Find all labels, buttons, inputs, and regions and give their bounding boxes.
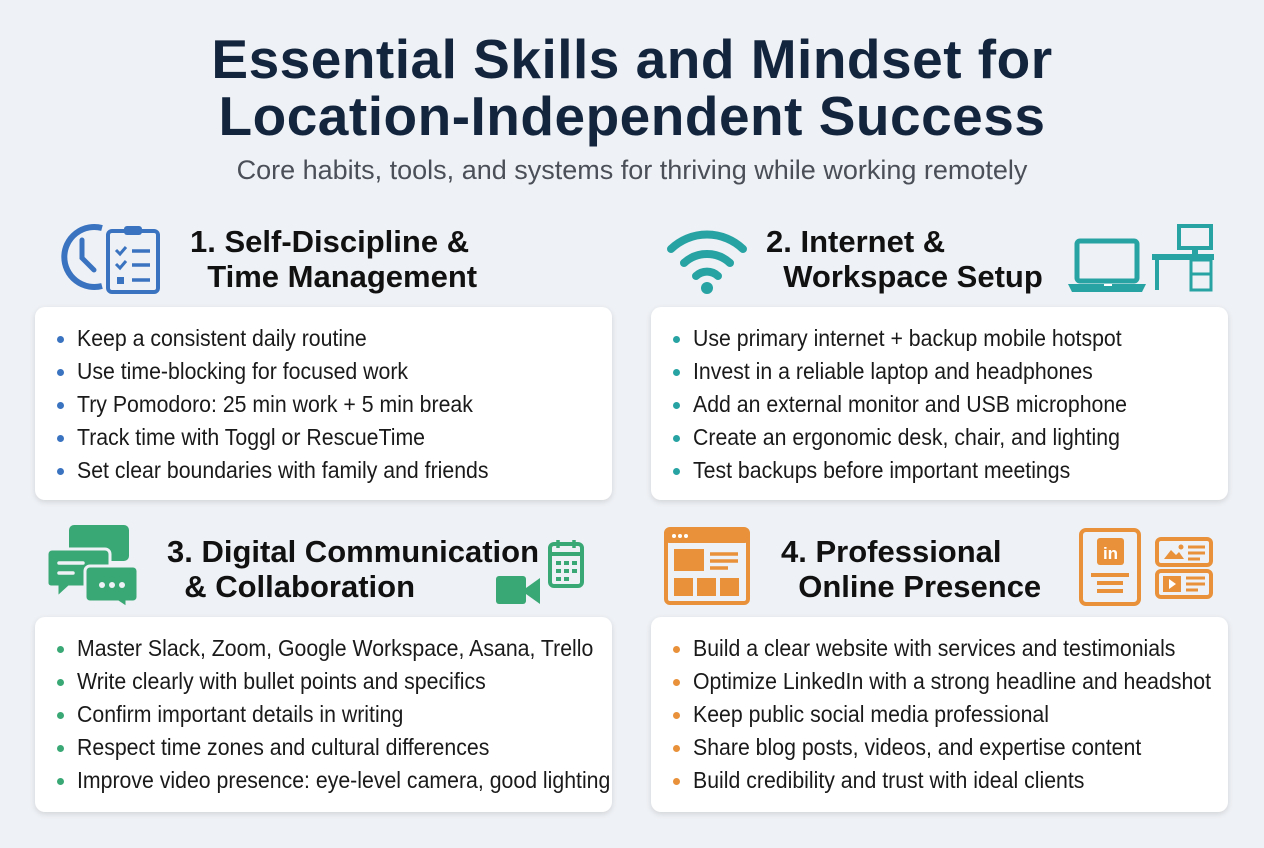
heading 3: 3. Digital Communication (167, 534, 539, 569)
subtitle: Core habits, tools, and systems for thriving while working remotely (237, 155, 1027, 185)
panel: online presence: Keep public social media professional (693, 701, 1049, 727)
panel: online presence (651, 617, 1228, 812)
icon: linkedin and media (1079, 528, 1213, 606)
title (211, 28, 1053, 147)
heading 4: Online Presence (798, 569, 1041, 604)
panel: internet: Create an ergonomic desk, chair, and lighting (693, 424, 1120, 450)
panel: communication (35, 617, 612, 812)
panel: communication: Confirm important details in writing (77, 701, 403, 727)
heading 1: 1. Self-Discipline & (190, 224, 469, 259)
icon: clock and checklist (61, 224, 160, 294)
panel: self-discipline: Set clear boundaries with family and friends (77, 457, 489, 483)
panel: self-discipline (35, 307, 612, 500)
panel: online presence: Build a clear website with services and testimonials (693, 635, 1175, 661)
panel: communication: Improve video presence: eye-level camera, good lighting (77, 767, 610, 793)
heading 3 (167, 534, 539, 604)
panel: internet: Add an external monitor and USB microphone (693, 391, 1127, 417)
panel: self-discipline: Use time-blocking for focused work (77, 358, 408, 384)
panel: internet (651, 307, 1228, 500)
heading 1 (190, 224, 477, 294)
heading 2: Workspace Setup (783, 259, 1043, 294)
heading 2: 2. Internet & (766, 224, 945, 259)
title: Location-Independent Success (219, 85, 1045, 147)
heading 4 (781, 534, 1041, 604)
panel: online presence: Build credibility and trust with ideal clients (693, 767, 1084, 793)
icon: laptop and desk (1068, 224, 1214, 292)
panel: communication: Write clearly with bullet points and specifics (77, 668, 486, 694)
panel: communication: Master Slack, Zoom, Google Workspace, Asana, Trello (77, 635, 593, 661)
heading 3: & Collaboration (184, 569, 415, 604)
panel: self-discipline: Keep a consistent daily routine (77, 325, 367, 351)
panel: internet: Test backups before important meetings (693, 457, 1070, 483)
panel: communication: Respect time zones and cultural differences (77, 734, 489, 760)
heading 4: 4. Professional (781, 534, 1002, 569)
icon: website layout (664, 527, 750, 605)
panel: internet: Use primary internet + backup mobile hotspot (693, 325, 1122, 351)
panel: self-discipline: Track time with Toggl or RescueTime (77, 424, 425, 450)
icon: wifi (667, 230, 747, 294)
panel: self-discipline: Try Pomodoro: 25 min work + 5 min break (77, 391, 473, 417)
panel: online presence: Share blog posts, videos, and expertise content (693, 734, 1141, 760)
title: Essential Skills and Mindset for (211, 28, 1053, 90)
panel: internet: Invest in a reliable laptop and headphones (693, 358, 1093, 384)
heading 2 (766, 224, 1043, 294)
icon: chat bubbles (48, 525, 136, 606)
icon: linkedin and media: in (1103, 544, 1118, 563)
icon: video and calendar (496, 540, 584, 604)
heading 1: Time Management (207, 259, 477, 294)
panel: online presence: Optimize LinkedIn with a strong headline and headshot (693, 668, 1211, 694)
